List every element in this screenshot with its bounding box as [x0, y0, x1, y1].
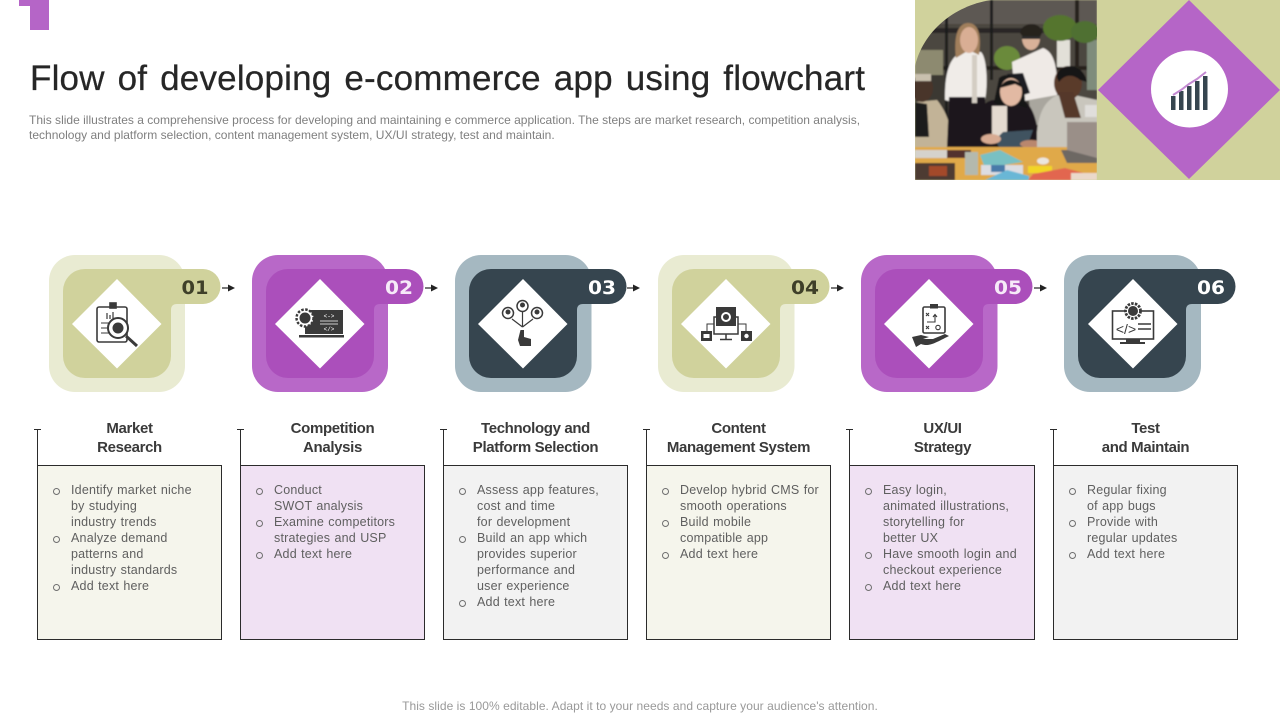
- column 4 panel: Develop hybrid CMS for: [680, 483, 819, 497]
- column 5 panel: Easy login,: [883, 483, 947, 497]
- step card 04: content management system: 04: [791, 278, 819, 299]
- column 3 heading: Platform Selection: [473, 439, 598, 456]
- column 6 panel: Provide with: [1087, 515, 1158, 529]
- column 2 panel: Conduct: [274, 483, 322, 497]
- column 6 panel: of app bugs: [1087, 499, 1156, 513]
- arrow 5: [1034, 284, 1047, 292]
- icon: monitor with code and gear: [1112, 304, 1154, 344]
- arrow 4: [831, 284, 844, 292]
- table and laptop: [915, 147, 1097, 180]
- column 1 panel: Analyze demand: [71, 531, 168, 545]
- column 5 panel: Add text here: [883, 579, 961, 593]
- step card 02: competition analysis: [252, 255, 424, 392]
- column 1 heading: [97, 420, 162, 456]
- icon: CMS monitor with network: [701, 307, 752, 341]
- step card 05: UX/UI strategy: [861, 255, 1032, 392]
- arrow 2: [425, 284, 438, 292]
- column 1 panel: industry standards: [71, 563, 177, 577]
- column 1 heading: Research: [97, 439, 162, 456]
- column 2 panel: Add text here: [274, 547, 352, 561]
- column 3 bracket line: [440, 429, 447, 465]
- column 1 bracket line: [34, 429, 41, 465]
- column 1 panel: by studying: [71, 499, 137, 513]
- step card 01: market research: 01: [182, 278, 208, 299]
- column 2 panel: [240, 465, 425, 640]
- description text: [29, 113, 860, 142]
- column 3 panel: Assess app features,: [477, 483, 599, 497]
- column 6 heading: Test: [1131, 420, 1160, 437]
- column 5 heading: UX/UI: [923, 420, 962, 437]
- column 6 heading: and Maintain: [1102, 439, 1189, 456]
- arrow 1: [222, 284, 235, 292]
- column 4 heading: Content: [711, 420, 766, 437]
- column 5 panel: [849, 465, 1035, 640]
- column 1 heading: Market: [106, 420, 153, 437]
- title: Flow of developing e-commerce app using flowchart: [30, 59, 865, 98]
- step card 02: competition analysis: 02: [385, 278, 413, 299]
- photo of team: [911, 0, 1099, 180]
- step card 03: technology and platform selection: 03: [588, 278, 616, 299]
- step card 03: technology and platform selection: [455, 255, 626, 392]
- step card 05: UX/UI strategy: 05: [994, 278, 1022, 299]
- column 1 panel: [37, 465, 222, 640]
- arrow 3: [627, 284, 640, 292]
- white circle with growth chart icon: [1151, 50, 1228, 128]
- column 6 panel: Add text here: [1087, 547, 1165, 561]
- seated man right: [1037, 93, 1097, 147]
- description text: This slide illustrates a comprehensive process for developing and maintaining e commerce application. The steps are market research, competition analysis,: [29, 113, 860, 127]
- column 3 heading: Technology and: [481, 420, 590, 437]
- column 5 panel: storytelling for: [883, 515, 965, 529]
- step card 04: content management system: [658, 255, 830, 392]
- column 5 bracket line: [846, 429, 853, 465]
- column 1 panel: patterns and: [71, 547, 144, 561]
- footer note: This slide is 100% editable. Adapt it to your needs and capture your audience's attention.: [402, 699, 878, 713]
- column 4 panel: [646, 465, 831, 640]
- column 6 panel: Regular fixing: [1087, 483, 1167, 497]
- column 5 heading: [914, 420, 972, 456]
- column 1 panel: Identify market niche: [71, 483, 192, 497]
- column 1 panel: industry trends: [71, 515, 157, 529]
- icon: people and pointing hand: [502, 300, 542, 346]
- column 3 panel: provides superior: [477, 547, 577, 561]
- step card 06: test and maintain: 06: [1197, 278, 1225, 299]
- seated woman: [984, 100, 1038, 148]
- column 3 panel: cost and time: [477, 499, 555, 513]
- column 6 panel: [1053, 465, 1238, 640]
- column 4 panel: Add text here: [680, 547, 758, 561]
- column 4 panel: compatible app: [680, 531, 768, 545]
- standing woman: [945, 52, 987, 106]
- purple diamond: [1098, 0, 1280, 179]
- column 3 panel: performance and: [477, 563, 575, 577]
- column 6 heading: [1102, 420, 1189, 456]
- icon: strategy clipboard on hand: [912, 304, 949, 347]
- column 1 panel: Add text here: [71, 579, 149, 593]
- column 3 heading: [473, 420, 598, 456]
- column 5 panel: Have smooth login and: [883, 547, 1017, 561]
- column 2 heading: Competition: [291, 420, 374, 437]
- column 4 bracket line: [643, 429, 650, 465]
- column 5 heading: Strategy: [914, 439, 971, 456]
- icon: laptop with gear: <->: [324, 313, 335, 320]
- column 3 panel: Add text here: [477, 595, 555, 609]
- column 5 panel: better UX: [883, 531, 938, 545]
- column 5 panel: animated illustrations,: [883, 499, 1009, 513]
- icon: laptop with gear: </>: [324, 326, 335, 333]
- column 4 heading: [667, 420, 810, 456]
- column 2 panel: SWOT analysis: [274, 499, 363, 513]
- icon: clipboard with magnifier: [97, 303, 137, 346]
- column 2 heading: Analysis: [303, 439, 362, 456]
- column 2 heading: [291, 420, 374, 456]
- column 4 panel: Build mobile: [680, 515, 751, 529]
- column 3 panel: for development: [477, 515, 570, 529]
- column 2 bracket line: [237, 429, 244, 465]
- column 4 heading: Management System: [667, 439, 810, 456]
- left seated man: [915, 100, 952, 147]
- column 5 panel: checkout experience: [883, 563, 1002, 577]
- column 2 panel: Examine competitors: [274, 515, 395, 529]
- corner tab accent: [19, 0, 49, 30]
- column 3 panel: user experience: [477, 579, 570, 593]
- column 4 panel: smooth operations: [680, 499, 787, 513]
- icon: laptop with gear: [296, 310, 344, 338]
- description text: technology and platform selection, content management system, UX/UI strategy, test and maintain.: [29, 128, 555, 142]
- column 2 panel: strategies and USP: [274, 531, 386, 545]
- standing man: [1012, 48, 1057, 102]
- header image: team photo and chart diamond: [915, 0, 1280, 180]
- step card 06: test and maintain: [1064, 255, 1236, 392]
- column 6 panel: regular updates: [1087, 531, 1177, 545]
- column 3 panel: Build an app which: [477, 531, 587, 545]
- icon: monitor with code and gear: </>: [1116, 321, 1136, 337]
- column 3 panel: [443, 465, 628, 640]
- column 6 bracket line: [1050, 429, 1057, 465]
- step card 01: market research: [49, 255, 220, 392]
